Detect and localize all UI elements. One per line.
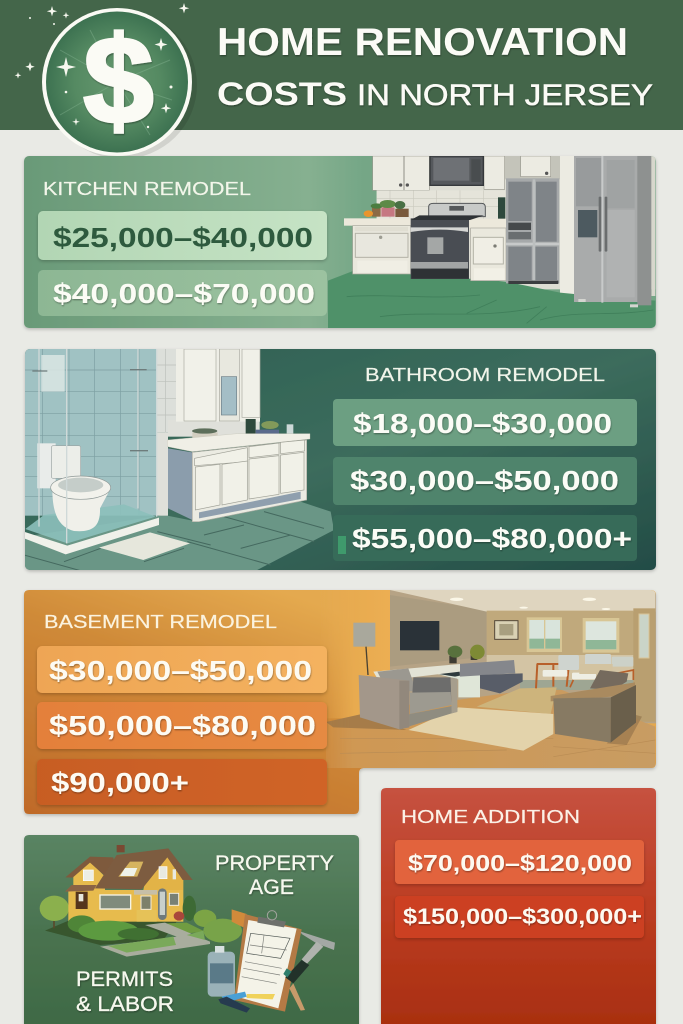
dark bottle: [498, 197, 505, 219]
french-door fridge: [506, 178, 559, 283]
backsplash: [376, 190, 430, 218]
ceiling lights: [450, 598, 463, 601]
title: HOME RENOVATION: [217, 21, 628, 64]
illustration: house: [40, 845, 335, 1013]
base cabinet right: [471, 228, 506, 281]
price: $90,000+: [37, 759, 327, 805]
heading: kitchen remodel: KITCHEN REMODEL: [43, 179, 251, 199]
price: $30,000–$50,000: [333, 457, 637, 505]
panel: property age and permits: [24, 835, 359, 1024]
price: $70,000–$120,000: $70,000–$120,000: [408, 850, 632, 876]
panel: home addition: [381, 788, 656, 1024]
vanity: [167, 434, 310, 452]
toilet bowl: [52, 488, 109, 531]
low wall: [373, 664, 460, 677]
price: $150,000–$300,000+: $150,000–$300,000+: [403, 904, 642, 929]
main rug: [408, 707, 553, 751]
price: $70,000–$120,000: [395, 840, 644, 884]
price: $30,000–$50,000: $30,000–$50,000: [350, 465, 619, 496]
panel: kitchen remodel: [24, 156, 656, 330]
price: $40,000–$70,000: [38, 270, 327, 316]
ground shadow: [45, 920, 177, 945]
left armchair: [377, 668, 417, 692]
markers: [222, 992, 247, 1003]
tile strip: [157, 349, 176, 432]
price: $55,000–$80,000+: [333, 515, 637, 561]
rug: [99, 532, 190, 560]
price: $40,000–$70,000: $40,000–$70,000: [53, 278, 315, 309]
picture: [495, 621, 518, 639]
counters: [344, 218, 412, 226]
bottle: [208, 952, 235, 997]
price: $50,000–$80,000: $50,000–$80,000: [49, 710, 316, 741]
clipboard: [232, 909, 247, 927]
path and lawn: [100, 923, 210, 957]
price: $18,000–$30,000: [333, 399, 637, 446]
microwave: [430, 156, 483, 185]
floor: [24, 498, 334, 572]
side table: [435, 669, 480, 697]
base cabinet left: [353, 226, 411, 274]
floor lamp: [353, 623, 375, 647]
price: $30,000–$50,000: $30,000–$50,000: [49, 655, 312, 686]
tall fridge: [574, 156, 638, 302]
grey sofa: [458, 660, 515, 677]
label: property age: [215, 852, 334, 899]
panel: bathroom remodel: [24, 349, 656, 572]
label: permits and labor: & LABOR: [76, 993, 174, 1016]
doors and windows: [76, 892, 88, 909]
shrub tree: [51, 915, 56, 928]
teal skirting: [520, 680, 633, 690]
illustration: bathroom: [24, 349, 334, 572]
small rug: [477, 687, 557, 714]
price: $25,000–$40,000: [38, 211, 327, 260]
title: IN NORTH JERSEY: [357, 79, 653, 112]
label: property age: AGE: [249, 876, 294, 899]
shower base: [24, 518, 159, 554]
price: $150,000–$300,000+: [395, 896, 644, 938]
glass frames: [39, 349, 157, 543]
vanity wall: [168, 420, 260, 437]
icon: dollar coin badge: [15, 3, 197, 159]
upper cabinet: [176, 349, 260, 422]
upper cabinets: [373, 156, 429, 190]
roofs: [65, 857, 116, 878]
plants: [449, 656, 457, 663]
hammer: [301, 932, 335, 950]
toilet tank: [37, 443, 56, 488]
right sofa: [590, 670, 628, 690]
price: $50,000–$80,000: [37, 702, 327, 749]
counter items: [192, 432, 218, 438]
label: permits and labor: [76, 968, 174, 1016]
floor: [328, 271, 655, 330]
price: $25,000–$40,000: $25,000–$40,000: [53, 222, 313, 253]
floor: [326, 687, 655, 770]
shrubs: [68, 915, 96, 933]
price: $90,000+: $90,000+: [51, 767, 189, 798]
range: [411, 218, 469, 279]
illustration: kitchen: [328, 156, 655, 330]
price: $55,000–$80,000+: $55,000–$80,000+: [352, 523, 632, 554]
panel: basement remodel: [24, 590, 657, 814]
wooden chairs: [536, 664, 578, 688]
illustration: basement: [320, 590, 657, 770]
title: COSTS: [217, 76, 347, 112]
tv: [400, 621, 439, 650]
house walls: [68, 890, 183, 922]
icon: dollar coin badge: $: [84, 13, 154, 150]
heading: bathroom remodel: BATHROOM REMODEL: [365, 365, 605, 385]
heading: basement remodel: BASEMENT REMODEL: [44, 612, 277, 632]
label: permits and labor: PERMITS: [76, 968, 173, 991]
header banner: [0, 0, 683, 130]
plants: [372, 207, 381, 217]
price: $18,000–$30,000: $18,000–$30,000: [353, 408, 612, 439]
title: [217, 21, 653, 112]
heading: home addition: HOME ADDITION: [401, 807, 580, 827]
price: $30,000–$50,000: [37, 646, 327, 693]
label: property age: PROPERTY: [215, 852, 334, 875]
windows: [527, 617, 562, 652]
tiled wall: [24, 349, 157, 516]
